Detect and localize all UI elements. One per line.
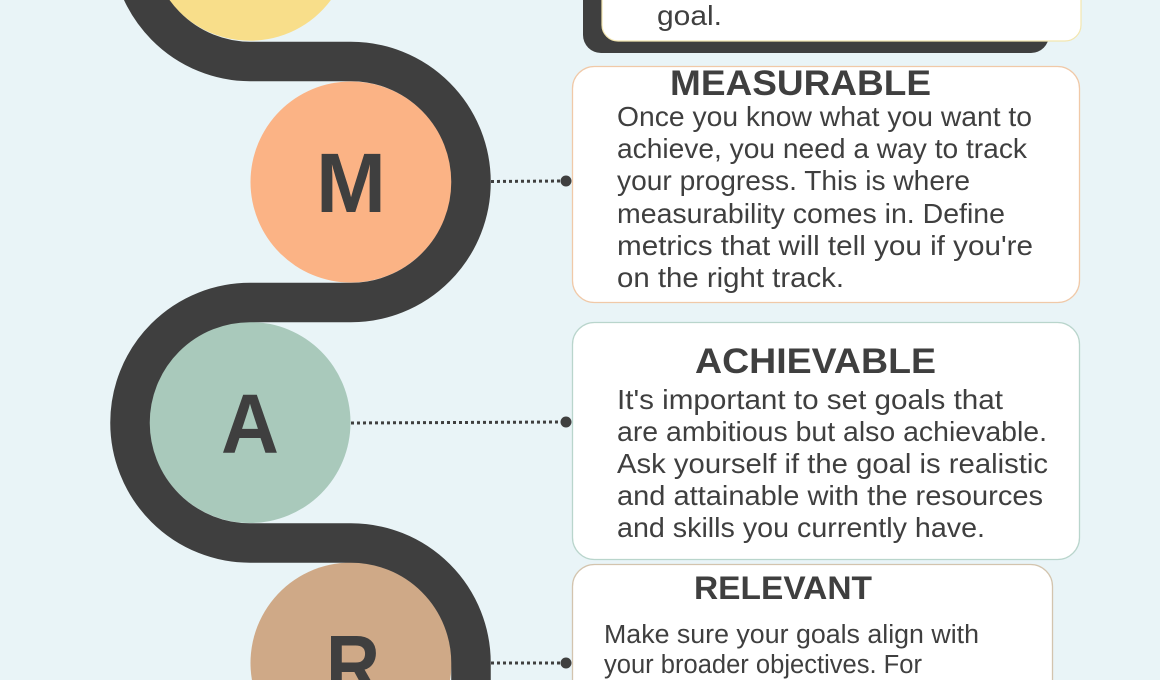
- winding path: [130, 0, 471, 680]
- heading: achievable: ACHIEVABLE: [695, 342, 936, 381]
- connector: M: [491, 176, 572, 186]
- panel: relevant (cropped): [572, 564, 1052, 680]
- text: achievable body: and attainable with the resources: [617, 480, 1043, 511]
- text: measurable body: on the right track.: [617, 262, 844, 293]
- text: measurable body: metrics that will tell you if you're: [617, 230, 1033, 261]
- connector: R: [491, 658, 572, 668]
- panel: measurable: [572, 64, 1080, 302]
- heading: relevant: RELEVANT: [694, 570, 872, 606]
- text: relevant body: [604, 621, 979, 679]
- text: relevant body: Make sure your goals align with: [604, 621, 979, 649]
- text: measurable body: Once you know what you want to: [617, 101, 1032, 132]
- letter M: M: [316, 136, 386, 230]
- circle: M: [250, 82, 452, 282]
- text: specific ending: goal.: [657, 0, 722, 31]
- heading: measurable: MEASURABLE: [670, 64, 931, 103]
- circle: R: [250, 562, 452, 680]
- text: measurable body: measurability comes in. Define: [617, 198, 1005, 229]
- letter A: A: [221, 377, 279, 471]
- circle: S (yellow, cropped): [169, 0, 331, 41]
- text: achievable body: and skills you currently have.: [617, 512, 985, 543]
- connector: A: [351, 416, 572, 428]
- text: achievable body: are ambitious but also achievable.: [617, 416, 1047, 447]
- text: achievable body: Ask yourself if the goal is realistic: [617, 448, 1048, 479]
- text: relevant body: your broader objectives. For: [604, 651, 923, 679]
- text: measurable body: [617, 101, 1033, 293]
- circle: A: [150, 322, 350, 523]
- panel: achievable: [572, 322, 1080, 560]
- text: achievable body: It's important to set goals that: [617, 384, 1003, 415]
- text: achievable body: [617, 384, 1048, 543]
- text: measurable body: your progress. This is where: [617, 165, 970, 196]
- text: measurable body: achieve, you need a way to track: [617, 133, 1027, 164]
- panel: specific (cropped): [583, 0, 1081, 53]
